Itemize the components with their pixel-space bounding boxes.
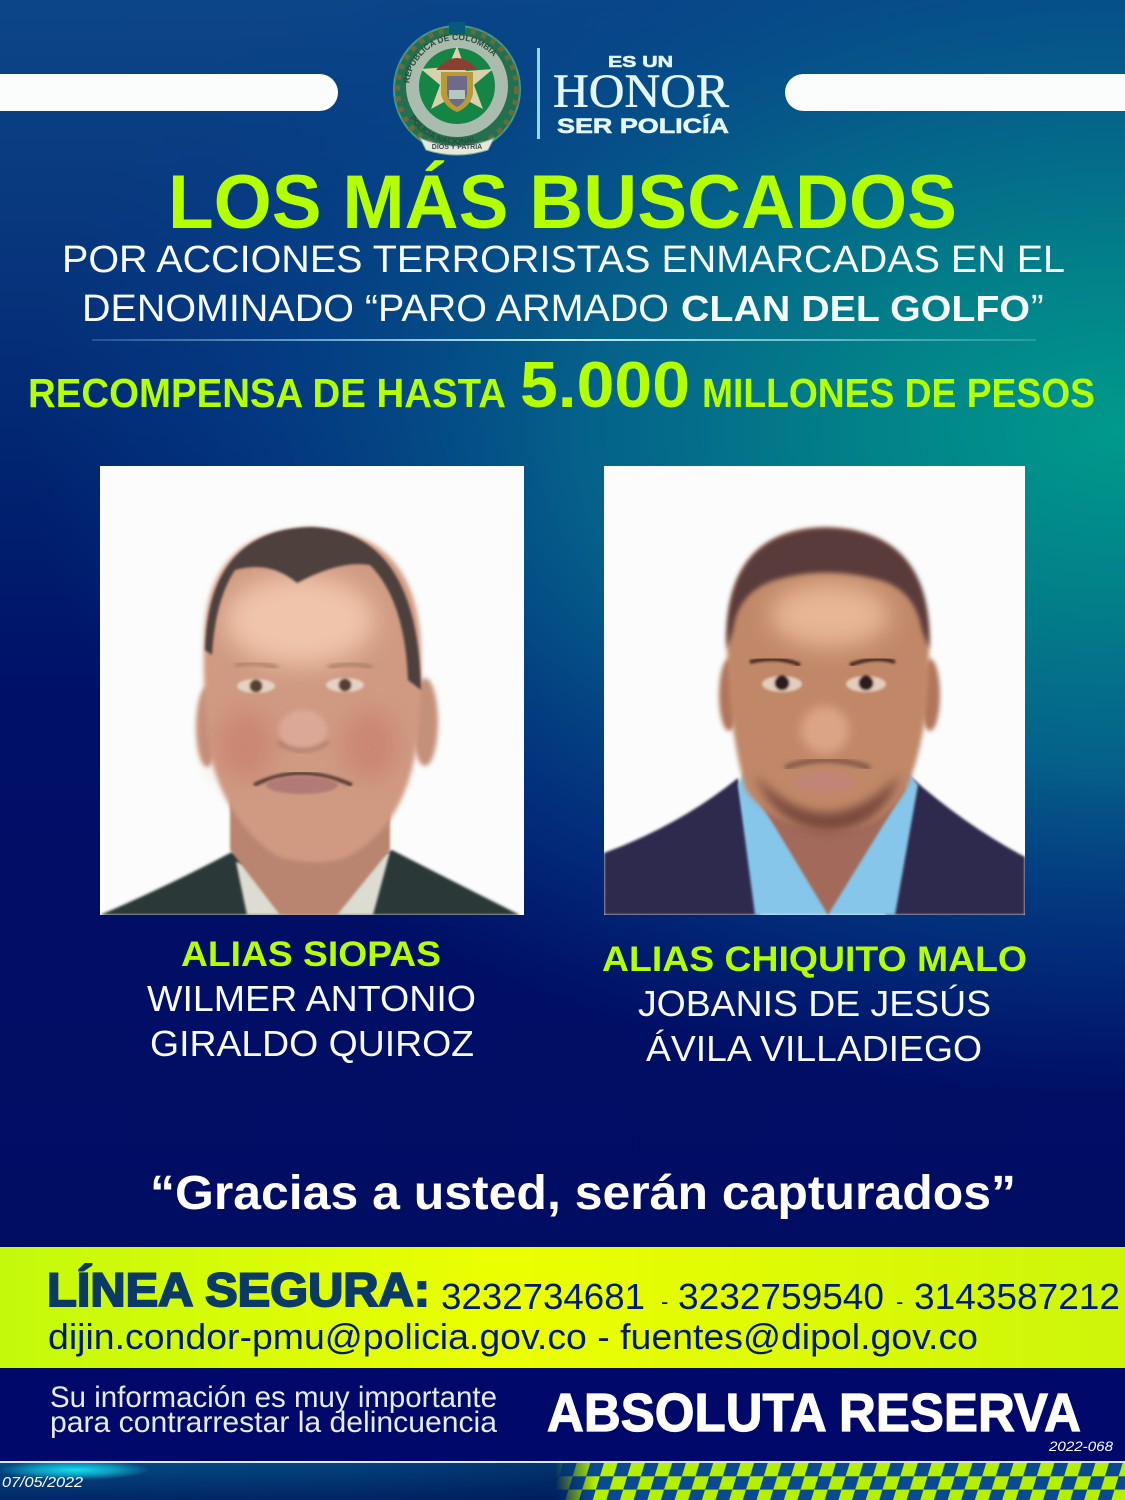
suit [100, 850, 520, 915]
photo: alias Siopas [100, 466, 524, 915]
header bar right [785, 74, 1125, 111]
nose [278, 710, 328, 750]
bulletin number: 2022-068 [1048, 1439, 1114, 1454]
title: LOS MÁS BUSCADOS [168, 160, 957, 245]
subtitle: ” [1031, 288, 1044, 330]
shirt [738, 760, 918, 915]
phone numbers: - [896, 1289, 903, 1314]
moustache [254, 774, 352, 785]
header bar left [0, 74, 338, 111]
quote: “Gracias a usted, serán capturados” [150, 1167, 1016, 1220]
moustache [785, 760, 870, 768]
mouth [266, 776, 338, 794]
contact band [0, 1247, 1125, 1368]
emails: dijin.condor-pmu@policia.gov.co - fuentes@dipol.gov.co [48, 1316, 978, 1357]
logo divider [537, 48, 540, 139]
reward line: MILLONES DE PESOS [702, 370, 1095, 416]
forehead highlight [770, 583, 890, 647]
hotline heading: LÍNEA SEGURA: [47, 1263, 430, 1316]
icon: police seal: REPUBLICA DE COLOMBIA [404, 34, 496, 83]
ears [196, 678, 438, 767]
jaw shade [755, 775, 900, 832]
name block right: ALIAS CHIQUITO MALO [602, 940, 1027, 979]
info text: Su información es muy importante [50, 1381, 497, 1414]
logo slogan [553, 54, 729, 138]
neck [758, 784, 906, 915]
shirt [236, 852, 390, 915]
phone numbers [441, 1276, 1120, 1317]
date: 07/05/2022 [2, 1474, 84, 1491]
logo slogan: SER POLICÍA [557, 115, 729, 138]
reward line: RECOMPENSA DE HASTA [28, 370, 506, 416]
checker pattern [555, 1463, 1125, 1500]
icon: police seal: DIOS Y PATRIA [432, 144, 482, 151]
subtitle: CLAN DEL GOLFO [681, 288, 1030, 329]
hair [205, 527, 421, 690]
brows [750, 659, 895, 665]
eyes [237, 678, 364, 693]
brows [235, 663, 372, 668]
reward line: 5.000 [520, 348, 690, 421]
phone numbers: - [661, 1289, 668, 1314]
subtitle: DENOMINADO “PARO ARMADO [82, 288, 669, 330]
name block left: ALIAS SIOPAS [181, 935, 441, 974]
neck [230, 800, 390, 915]
name block right [602, 940, 1027, 1069]
nose [801, 706, 849, 754]
police logo [393, 22, 730, 156]
subtitle [62, 239, 1065, 330]
reserve band [0, 1368, 1125, 1462]
icon: police seal [393, 22, 521, 156]
reward line [28, 348, 1095, 421]
mouth [793, 773, 853, 791]
name block left: GIRALDO QUIROZ [150, 1023, 474, 1064]
info text: para contrarrestar la delincuencia [50, 1406, 497, 1439]
forehead highlight [225, 575, 375, 665]
ears [719, 659, 940, 731]
eyes [762, 676, 886, 692]
hair [727, 528, 929, 650]
logo slogan: ES UN [608, 54, 673, 71]
face [727, 528, 929, 832]
icon: police seal: POLICIA NACIONAL [410, 115, 477, 144]
subtitle: POR ACCIONES TERRORISTAS ENMARCADAS EN EL [62, 239, 1065, 281]
photo: alias Chiquito Malo [604, 466, 1025, 915]
phone numbers: 3232734681 [441, 1276, 645, 1317]
name block left: WILMER ANTONIO [147, 978, 476, 1019]
name block left [147, 935, 476, 1064]
phone numbers: 3232759540 [678, 1276, 884, 1317]
absoluta reserva: ABSOLUTA RESERVA [547, 1383, 1081, 1443]
footer [0, 1460, 1125, 1500]
cheek tint [217, 710, 398, 780]
name block right: ÁVILA VILLADIEGO [646, 1028, 982, 1069]
name block right: JOBANIS DE JESÚS [638, 983, 991, 1024]
logo slogan: HONOR [553, 65, 729, 118]
jacket [604, 778, 1025, 915]
face [204, 528, 421, 862]
phone numbers: 3143587212 [914, 1276, 1120, 1317]
info text [50, 1381, 497, 1439]
